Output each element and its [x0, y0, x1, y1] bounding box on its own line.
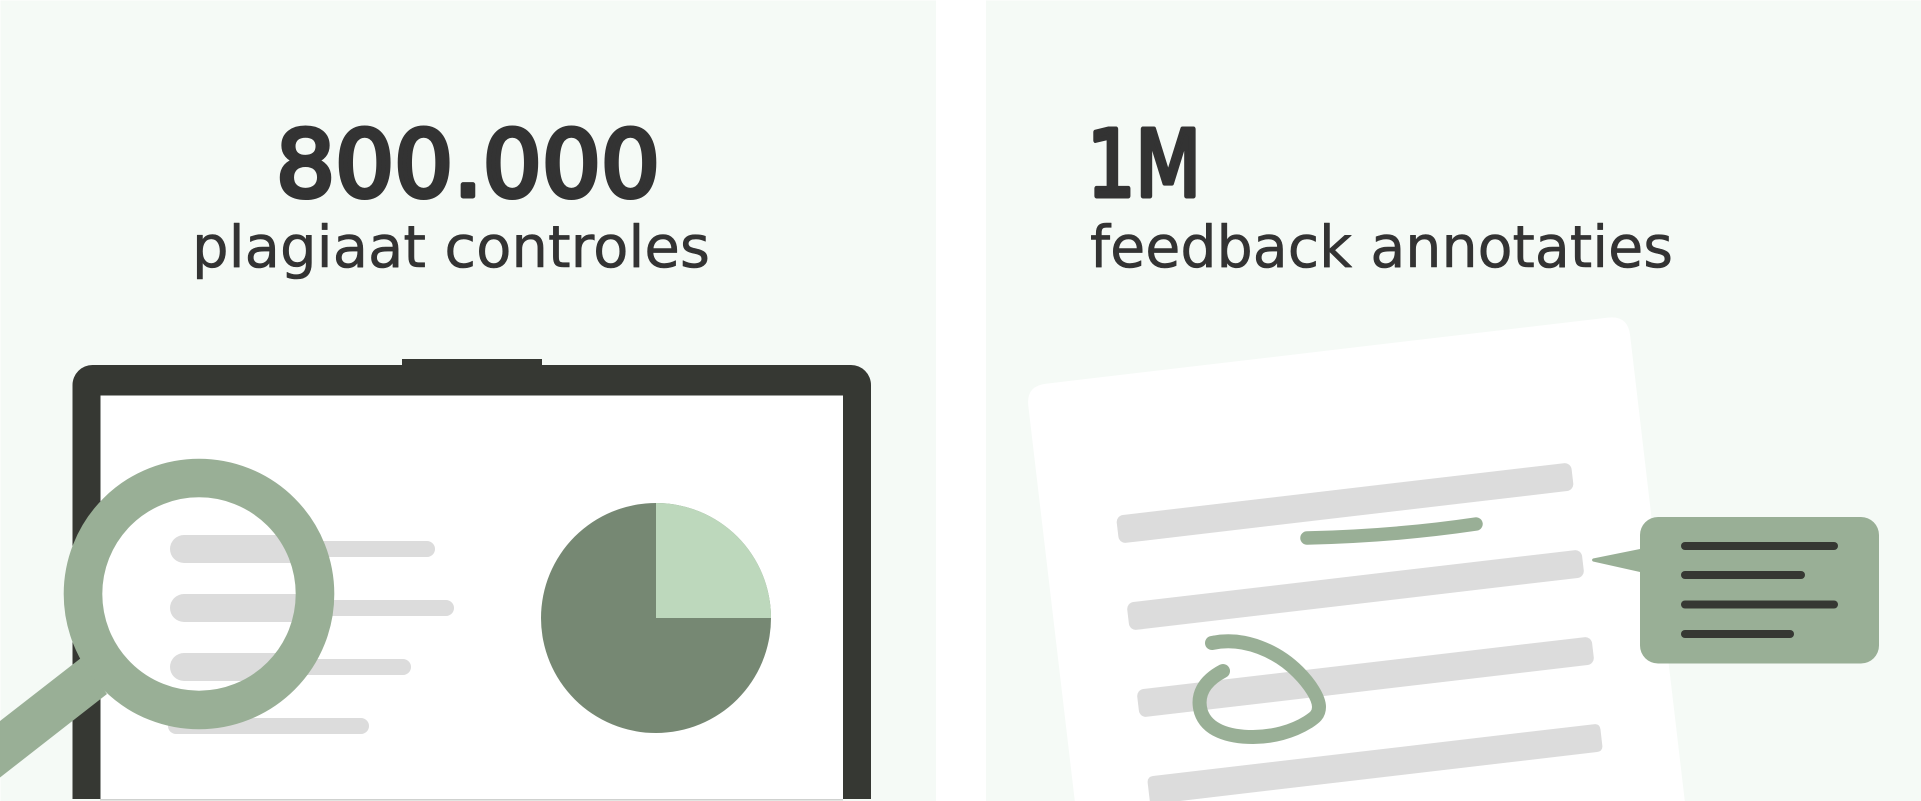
label: feedback annotaties: feedback annotaties	[1090, 213, 1673, 281]
heading: 1M: 1M	[1087, 111, 1201, 218]
pie chart	[541, 503, 771, 733]
panel: feedback annotations	[986, 0, 1921, 801]
comment speech bubble	[1592, 517, 1879, 664]
annotation: hand-drawn circle	[1200, 641, 1319, 737]
gray text bars	[168, 541, 454, 734]
panel: plagiarism checks	[0, 0, 936, 801]
annotation: underline stroke	[1307, 524, 1476, 538]
document text lines	[1116, 462, 1602, 801]
tablet frame	[72, 359, 871, 800]
icon: magnifying glass	[0, 478, 390, 778]
heading: 800.000: 800.000	[276, 111, 660, 218]
document sheet	[1028, 317, 1685, 801]
label: plagiaat controles: plagiaat controles	[192, 213, 710, 281]
